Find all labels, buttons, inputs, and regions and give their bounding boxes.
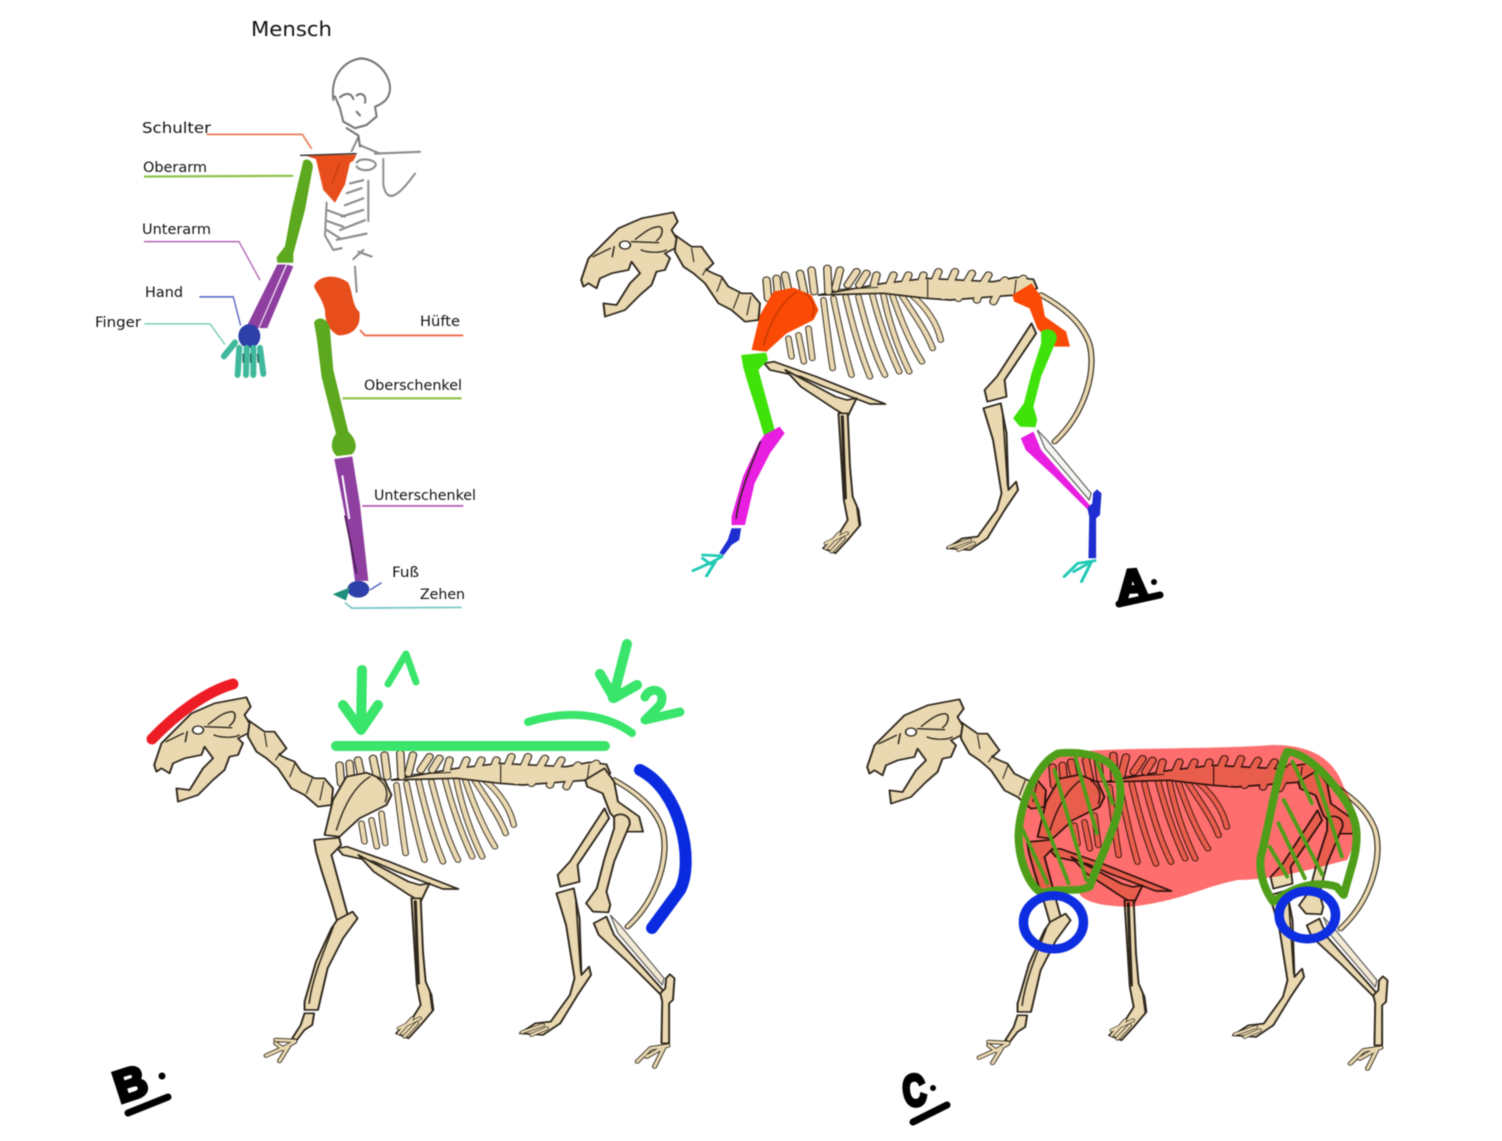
foot: [347, 581, 369, 598]
panel label: B: B: [108, 1056, 153, 1113]
number 2: [645, 690, 680, 720]
blue front joint ring: [1023, 896, 1083, 949]
label: Finger: Finger: [95, 315, 141, 331]
title: Mensch: Mensch: [251, 17, 332, 41]
blue tail arc: [640, 770, 686, 928]
skeleton B: [154, 697, 675, 1067]
green hip mass: [1260, 752, 1357, 902]
label: Hand: Hand: [145, 285, 183, 301]
blue rear joint ring: [1279, 891, 1336, 939]
upper arm: [277, 159, 313, 263]
forearm: [247, 265, 293, 328]
fingers: [224, 343, 263, 375]
arrow 2: [600, 644, 637, 698]
panel label: C: C: [900, 1065, 929, 1117]
thigh: [314, 318, 356, 456]
shoulder blade: [300, 154, 357, 203]
skeleton C: [867, 699, 1388, 1069]
label: Zehen: Zehen: [420, 587, 465, 603]
panel A: colour-coded animal skeleton: [581, 212, 1102, 582]
hip: [314, 277, 360, 335]
rib cage and right arm sketch: [325, 137, 420, 292]
red head line: [152, 684, 233, 739]
green curve: [528, 715, 632, 733]
panel label: A: A: [1116, 560, 1150, 609]
panel: human skeleton diagram: [144, 58, 463, 608]
overlay group: [1019, 745, 1357, 949]
hand: [238, 324, 260, 348]
label: Oberschenkel: Oberschenkel: [364, 378, 462, 394]
panel B: skeleton with back and head line annotations: [152, 644, 686, 1067]
arrow 1: [343, 670, 378, 730]
red body mass: [1019, 745, 1356, 907]
lower leg: [334, 457, 368, 581]
label: Unterschenkel: Unterschenkel: [374, 488, 476, 504]
label: Unterarm: Unterarm: [142, 222, 211, 238]
green shoulder mass: [1019, 753, 1121, 893]
toes: [333, 587, 350, 600]
label: Schulter: Schulter: [142, 119, 212, 137]
skull sketch: [333, 58, 390, 146]
green back line: [336, 741, 605, 751]
panel C: skeleton with body mass overlays: [867, 699, 1388, 1069]
label: Hüfte: Hüfte: [420, 314, 460, 330]
number 1: [388, 654, 416, 684]
label: Fuß: Fuß: [392, 565, 419, 581]
leader lines: [144, 134, 463, 608]
label: Oberarm: Oberarm: [143, 160, 207, 176]
